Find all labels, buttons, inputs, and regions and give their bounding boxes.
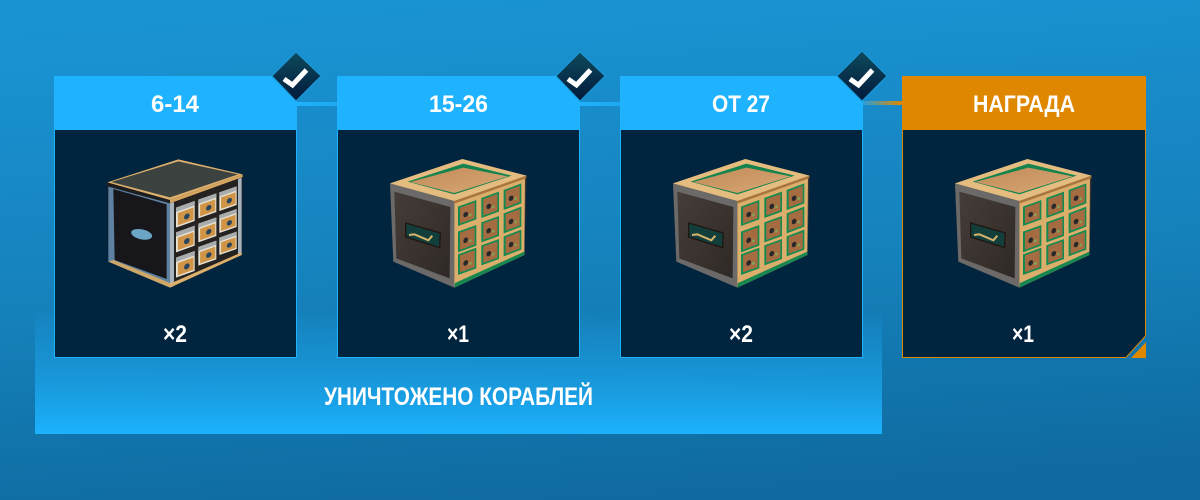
icon: wood crate — [390, 159, 527, 288]
panel: tier 15-26 — [337, 76, 580, 358]
quantity x2: ×2 — [163, 321, 187, 348]
heading: reward: НАГРАДА — [973, 91, 1075, 118]
icon: silver crate — [107, 159, 243, 288]
icon: wood crate — [955, 159, 1092, 288]
quantity x1: ×1 — [447, 321, 469, 348]
quantity x1: ×1 — [1012, 321, 1034, 348]
caption: ships destroyed: УНИЧТОЖЕНО КОРАБЛЕЙ — [324, 381, 593, 411]
connector 2-3 — [580, 102, 620, 106]
panel: tier 6-14 — [54, 76, 297, 358]
check badge 2 — [556, 52, 605, 101]
heading: from 27: ОТ 27 — [712, 91, 770, 118]
heading: 15-26: 15-26 — [429, 91, 488, 118]
panel: reward — [902, 76, 1146, 358]
check badge 3 — [837, 51, 887, 101]
icon: wood crate — [673, 159, 810, 288]
check badge 1 — [272, 52, 321, 101]
quantity x2: ×2 — [729, 321, 753, 348]
connector 1-2 — [297, 102, 337, 106]
corner triangle — [1131, 342, 1146, 358]
panel: tier from 27 — [620, 76, 863, 358]
connector 3-reward — [863, 101, 902, 105]
band: destroyed ships caption panel — [35, 310, 882, 434]
heading: 6-14: 6-14 — [151, 91, 199, 118]
